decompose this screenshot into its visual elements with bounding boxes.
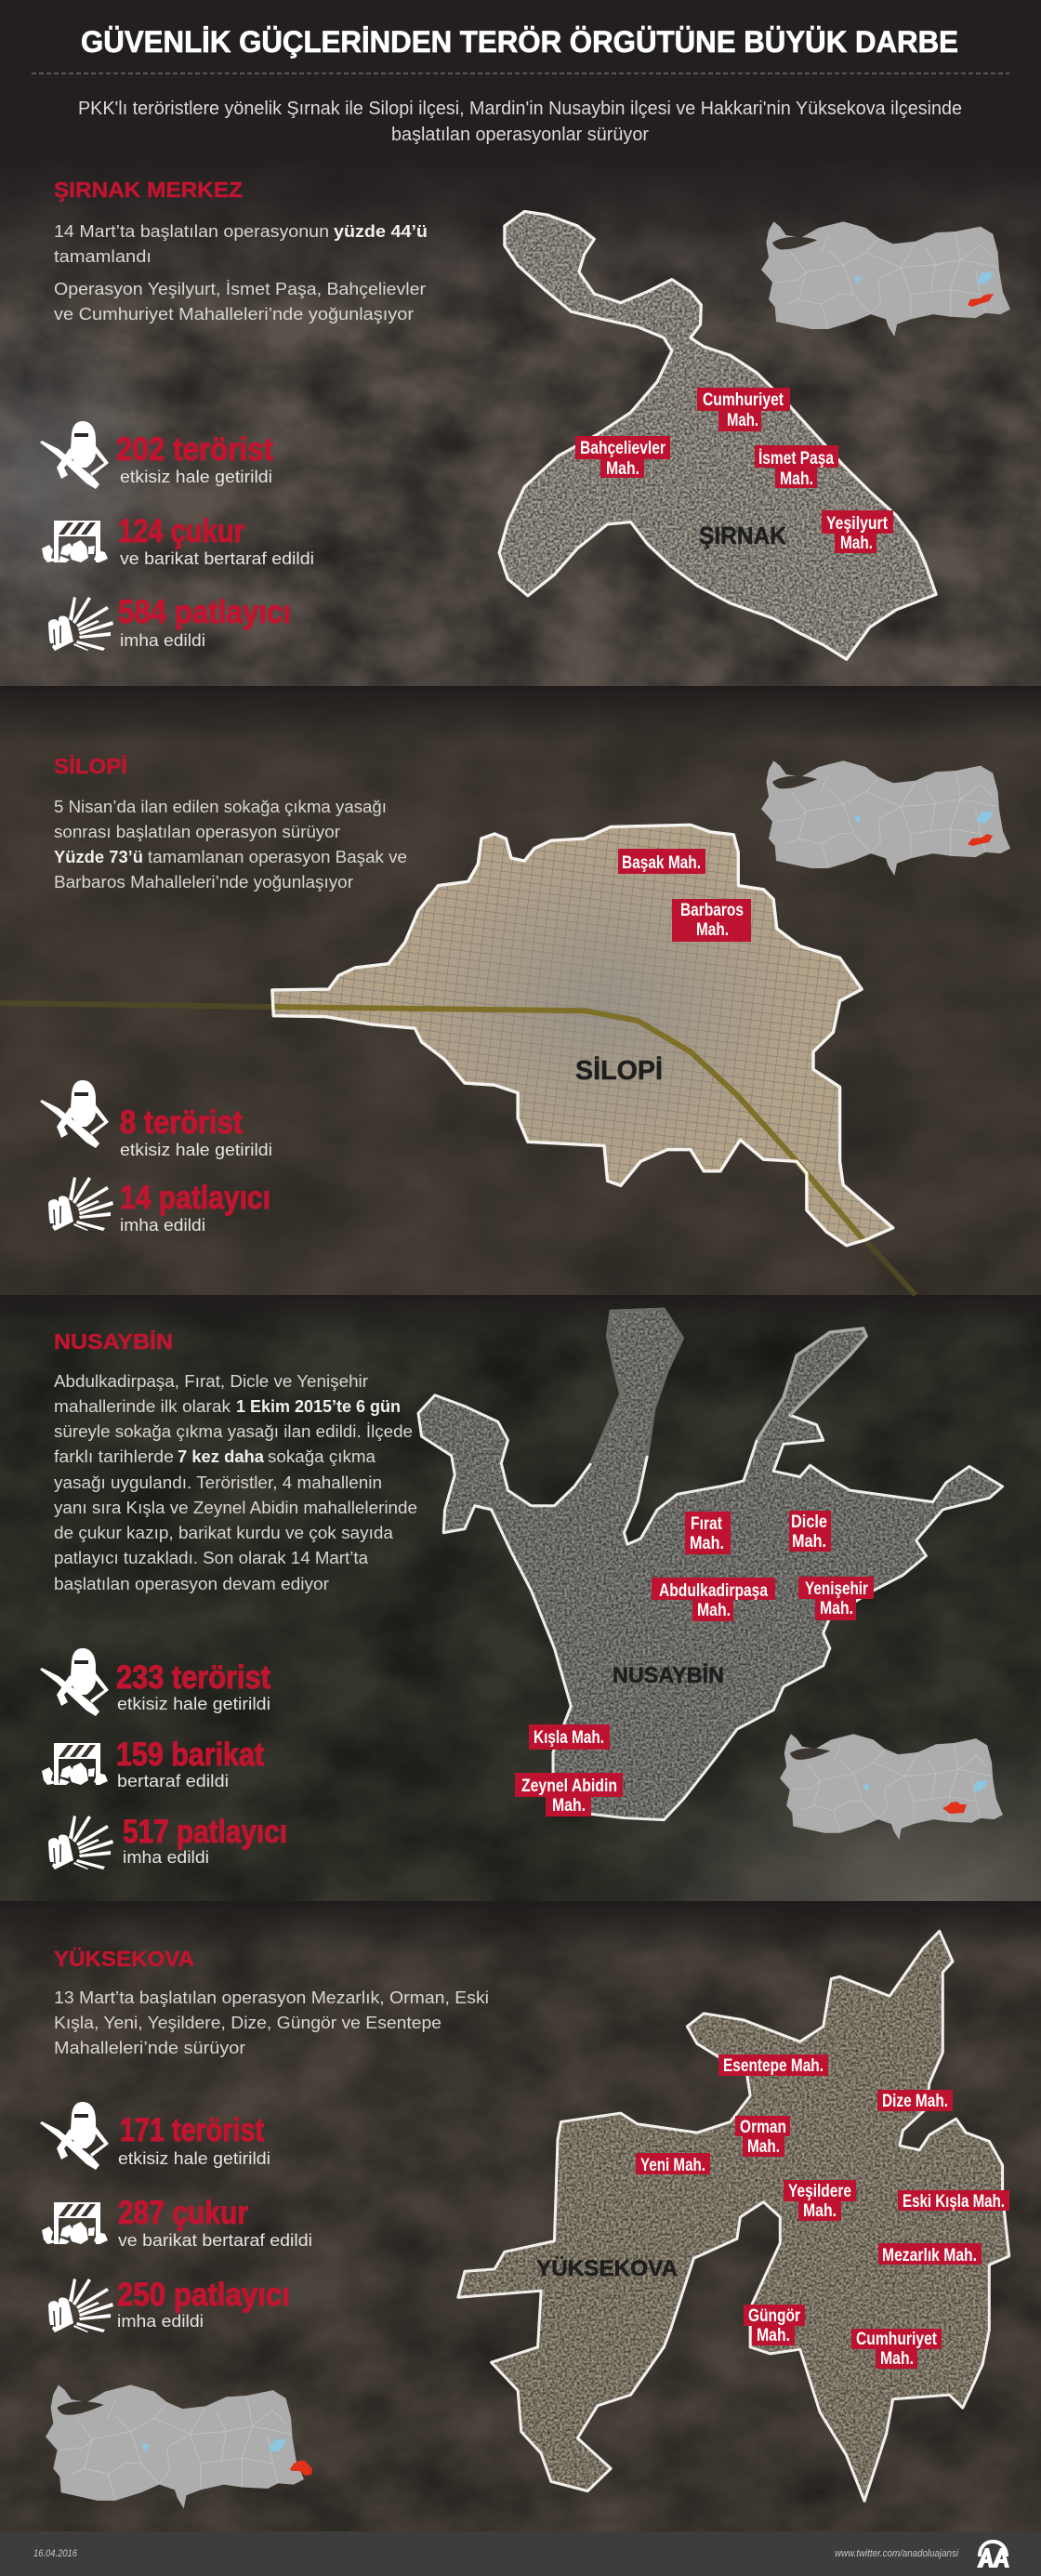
text block: Nusaybin summary: süreyle sokağa çıkma yasağı ilan edildi. İlçede [54,1422,413,1441]
panel: Şırnak Merkez [40,178,1010,659]
label: Dicle Mah. [789,1511,831,1552]
intro text: PKK'lı teröristlere yönelik Şırnak ile Silopi ilçesi, Mardin'in Nusaybin ilçesi ve Hakkari'nin Yüksekova ilçesinde [78,99,962,119]
text block: Nusaybin summary: farklı tarihlerde [54,1447,174,1466]
label: Başak Mah.: Başak Mah. [622,853,701,873]
label: Yeşilyurt Mah.: Yeşilyurt [826,514,889,534]
date: 16.04.2016 [33,2548,78,2559]
text block: Nusaybin summary: 1 Ekim 2015’te 6 gün [236,1397,401,1416]
stat: 171 terörist [118,2112,270,2168]
icon: AA logo [977,2540,1009,2568]
stat: 159 barikat [116,1737,264,1790]
text block: Şırnak summary: 14 Mart’ta başlatılan operasyonun [54,222,329,241]
icon: barricade [42,1743,108,1785]
text block: Nusaybin summary [54,1372,417,1593]
label: Mezarlık Mah.: Mezarlık Mah. [882,2246,977,2266]
stat: 287 çukur: 287 çukur [118,2195,248,2231]
stat: 233 terörist: etkisiz hale getirildi [117,1695,270,1713]
label: Yenişehir Mah.: Mah. [820,1599,853,1618]
icon: terrorist [40,1648,109,1716]
label: Yeşilyurt Mah.: Mah. [840,534,873,553]
text block: Nusaybin summary: de çukur kazıp, barikat kurdu ve çok sayıda [54,1524,394,1542]
label: Yeşildere Mah.: Yeşildere [788,2182,851,2201]
stat: 202 terörist [116,431,273,486]
stat: 584 patlayıcı: imha edildi [120,631,205,650]
label: Başak Mah. [618,849,705,874]
label: Cumhuriyet Mah. [851,2329,942,2369]
text block: Yüksekova summary: 13 Mart’ta başlatılan operasyon Mezarlık, Orman, Eski [54,1988,489,2007]
label: Fırat Mah. [685,1512,731,1554]
label: Cumhuriyet Mah.: Mah. [727,411,758,430]
stat: 250 patlayıcı: imha edildi [117,2312,204,2331]
label: Güngör Mah.: Güngör [748,2306,800,2326]
stat: 8 terörist: 8 terörist [120,1104,243,1141]
text block: Şırnak summary: ve Cumhuriyet Mahalleleri’nde yoğunlaşıyor [54,305,414,324]
stat: 202 terörist: 202 terörist [116,431,273,468]
text block: Silopi summary: tamamlanan operasyon Başak ve [148,848,407,866]
label: Zeynel Abidin Mah.: Zeynel Abidin [521,1777,617,1796]
label: Kışla Mah.: Kışla Mah. [534,1728,604,1748]
stat: 14 patlayıcı [120,1180,270,1235]
stat: 124 çukur [118,513,314,568]
label: Güngör Mah.: Mah. [757,2326,790,2345]
text block: Silopi summary: Barbaros Mahalleleri’nde yoğunlaşıyor [54,873,353,892]
label: Dicle Mah.: Mah. [792,1532,826,1552]
label: Dicle Mah.: Dicle [791,1513,827,1532]
map: Silopi: SİLOPİ [575,1056,663,1086]
stat: 287 çukur: ve barikat bertaraf edildi [118,2231,312,2250]
icon: barricade [42,521,108,562]
text block: Şırnak summary: Operasyon Yeşilyurt, İsmet Paşa, Bahçelievler [54,280,426,298]
label: Orman Mah. [735,2116,790,2157]
label: Zeynel Abidin Mah. [515,1773,623,1816]
label: Orman Mah.: Orman [740,2118,786,2137]
map: Nusaybin: NUSAYBİN [613,1663,724,1688]
stat: 584 patlayıcı [118,594,291,650]
stat: 159 barikat: bertaraf edildi [117,1772,229,1790]
text block: Nusaybin summary: başlatılan operasyon devam ediyor [54,1575,329,1593]
text block: Yüksekova summary [54,1988,489,2057]
stat: 159 barikat: 159 barikat [116,1737,264,1773]
stat: 202 terörist: etkisiz hale getirildi [120,468,272,486]
text block: Silopi summary: Yüzde 73’ü [54,848,143,866]
label: Zeynel Abidin Mah.: Mah. [552,1796,586,1816]
icon: explosive [48,1177,113,1231]
label: Güngör Mah. [744,2305,805,2345]
label: Yeşildere Mah.: Mah. [803,2201,837,2221]
label: Cumhuriyet Mah.: Cumhuriyet [703,390,784,410]
footer [0,2531,1041,2576]
icon: barricade [42,2202,108,2244]
map: Şırnak: ŞIRNAK [699,522,786,549]
intro text: başlatılan operasyonlar sürüyor [391,125,649,145]
locator map: Şırnak in Turkey [761,221,1010,337]
label: Yeşilyurt Mah. [822,510,893,553]
text block: Şırnak summary: yüzde 44’ü [334,222,428,241]
label: Abdulkadirpaşa Mah.: Abdulkadirpaşa [659,1581,768,1601]
stat: 250 patlayıcı [117,2277,290,2331]
label: Barbaros Mah.: Barbaros [680,901,744,920]
label: Fırat Mah.: Fırat [691,1514,723,1534]
label: İsmet Paşa Mah. [755,445,838,489]
text block: Yüksekova summary: Kışla, Yeni, Yeşildere, Dize, Güngör ve Esentepe [54,2014,441,2032]
text block: Silopi summary: sonrası başlatılan operasyon sürüyor [54,823,340,841]
stat: 517 patlayıcı: 517 patlayıcı [123,1814,287,1850]
label: Abdulkadirpaşa Mah. [652,1578,775,1621]
heading: Silopi: SİLOPİ [54,754,127,778]
map: Yüksekova: YÜKSEKOVA [536,2256,678,2281]
label: Barbaros Mah. [672,899,751,942]
label: Yenişehir Mah. [798,1577,874,1620]
text block: Nusaybin summary: mahallerinde ilk olarak [54,1397,231,1416]
stat: 14 patlayıcı: 14 patlayıcı [120,1180,270,1216]
label: Yeni Mah.: Yeni Mah. [640,2156,705,2175]
locator map: Silopi in Turkey [761,760,1010,876]
label: Esentepe Mah.: Esentepe Mah. [723,2056,824,2076]
map: Yüksekova [458,1931,1009,2501]
label: Yeşildere Mah. [784,2180,856,2221]
label: İsmet Paşa Mah.: İsmet Paşa [758,449,834,469]
stat: 8 terörist: etkisiz hale getirildi [120,1141,272,1159]
label: İsmet Paşa Mah.: Mah. [780,469,813,489]
map: Şırnak [499,211,936,659]
label: Barbaros Mah.: Mah. [696,920,729,940]
label: Dize Mah.: Dize Mah. [882,2092,948,2111]
panel: Nusaybin [40,1309,1003,1869]
stat: 171 terörist: 171 terörist [120,2112,264,2148]
stat: 233 terörist [116,1659,270,1713]
heading: Şırnak Merkez: ŞIRNAK MERKEZ [54,178,243,202]
label: Bahçelievler Mah. [575,436,670,479]
text block: Nusaybin summary: patlayıcı tuzakladı. Son olarak 14 Mart’ta [54,1549,369,1567]
label: Kışla Mah. [529,1724,610,1750]
label: Cumhuriyet Mah.: Mah. [880,2349,914,2369]
stat: 124 çukur: 124 çukur [118,513,244,549]
label: Yenişehir Mah.: Yenişehir [805,1579,868,1599]
text block: Nusaybin summary: 7 kez daha [178,1447,265,1466]
stat: 14 patlayıcı: imha edildi [120,1216,205,1235]
stat: 124 çukur: ve barikat bertaraf edildi [120,549,314,568]
text block: Nusaybin summary: sokağa çıkma [268,1447,376,1466]
map: Silopi [0,818,916,1295]
panel: Yüksekova [40,1931,1009,2508]
label: Abdulkadirpaşa Mah.: Mah. [697,1601,731,1620]
locator map: Yüksekova in Turkey [46,2384,312,2508]
text block: Nusaybin summary: yanı sıra Kışla ve Zeynel Abidin mahallelerinde [54,1499,417,1517]
label: Bahçelievler Mah.: Mah. [606,459,639,479]
icon: terrorist [40,421,109,489]
stat: 233 terörist: 233 terörist [116,1659,270,1696]
source link: www.twitter.com/anadoluajansi [835,2548,958,2559]
label: Cumhuriyet Mah.: Cumhuriyet [856,2330,938,2349]
text block: Nusaybin summary: Abdulkadirpaşa, Fırat, Dicle ve Yenişehir [54,1372,368,1391]
heading: Yüksekova: YÜKSEKOVA [54,1947,194,1971]
label: Fırat Mah.: Mah. [690,1534,724,1553]
map: Nusaybin [418,1309,1003,1820]
stat: 171 terörist: etkisiz hale getirildi [118,2149,270,2168]
text block: Silopi summary [54,798,407,892]
label: Eski Kışla Mah.: Eski Kışla Mah. [903,2192,1005,2212]
icon: terrorist [40,1080,109,1148]
title: GÜVENLİK GÜÇLERİNDEN TERÖR ÖRGÜTÜNE BÜYÜK DARBE [81,25,958,59]
stat: 517 patlayıcı [123,1814,287,1867]
text block: Şırnak summary: tamamlandı [54,247,152,266]
icon: explosive [48,2279,113,2332]
stat: 584 patlayıcı: 584 patlayıcı [118,594,291,630]
text block: Nusaybin summary: yasağı uygulandı. Teröristler, 4 mahallenin [54,1473,382,1492]
icon: terrorist [40,2102,109,2170]
text block: Şırnak summary [54,222,428,324]
stat: 287 çukur [118,2195,312,2250]
panel: Silopi [0,754,1010,1295]
label: Orman Mah.: Mah. [747,2137,780,2157]
stat: 8 terörist [120,1104,272,1159]
label: Cumhuriyet Mah. [697,388,790,431]
text block: Yüksekova summary: Mahalleleri’nde sürüyor [54,2039,245,2057]
text block: Silopi summary: 5 Nisan’da ilan edilen sokağa çıkma yasağı [54,798,387,816]
stat: 250 patlayıcı: 250 patlayıcı [117,2277,290,2313]
icon: explosive [48,597,113,651]
stat: 517 patlayıcı: imha edildi [123,1848,209,1867]
locator map: Nusaybin in Turkey [780,1734,1003,1840]
label: Bahçelievler Mah.: Bahçelievler [580,439,665,458]
heading: Nusaybin: NUSAYBİN [54,1329,173,1354]
icon: explosive [48,1816,113,1869]
intro text [78,99,962,145]
